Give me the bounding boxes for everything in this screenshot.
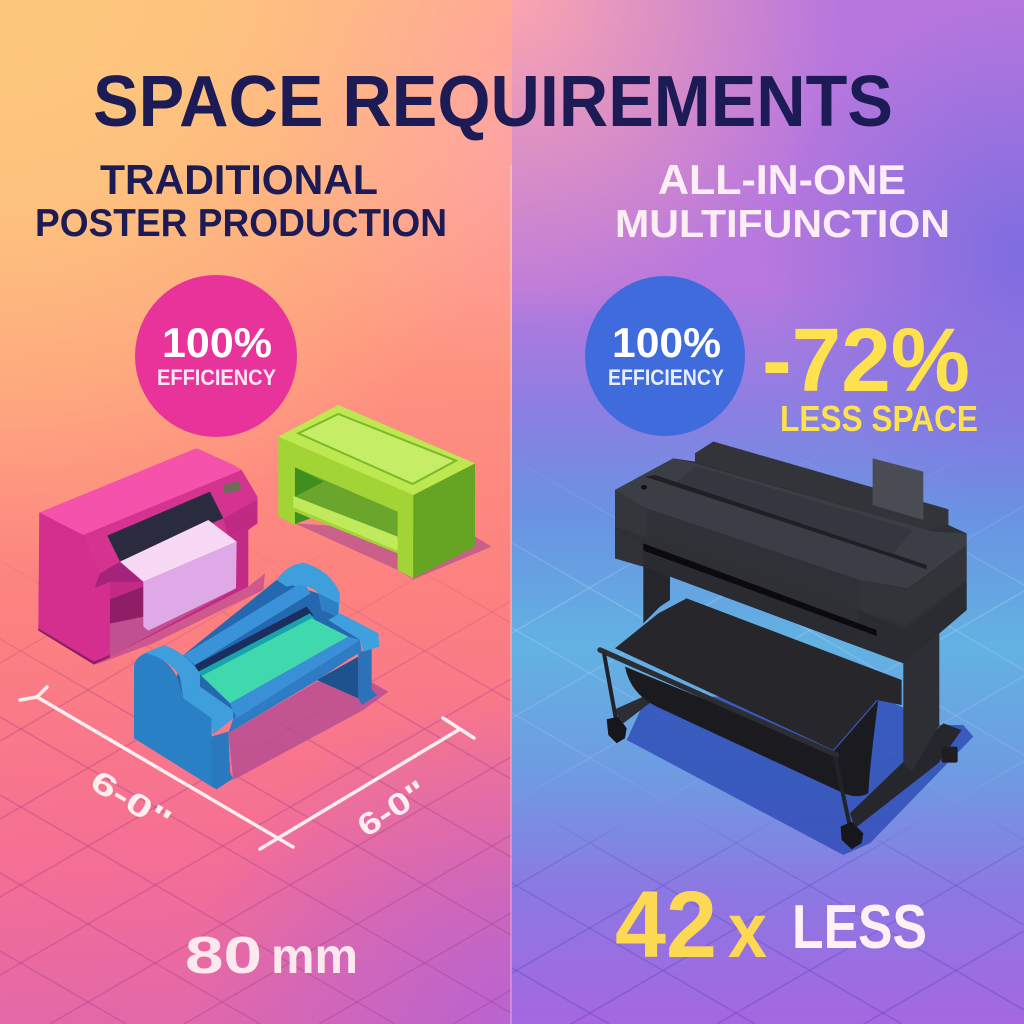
panel divider xyxy=(510,165,512,1024)
floor shadow xyxy=(627,697,973,855)
background: left panel gradient xyxy=(0,0,512,1024)
stat: 80mm: 80 xyxy=(185,927,262,985)
heading: all-in-one multifunction: ALL-IN-ONE xyxy=(658,156,906,203)
stat: 42x less xyxy=(615,872,927,978)
callout: -72% less space: -72% xyxy=(762,311,970,411)
stat: 80mm: mm xyxy=(271,928,358,984)
icon: dark all-in-one multifunction printer xyxy=(600,442,973,855)
heading: traditional poster production: TRADITIONAL xyxy=(100,156,378,203)
icon: blue laminator xyxy=(134,563,388,789)
icon: pink large-format printer xyxy=(38,448,265,665)
stat: 42x less: 42 xyxy=(615,872,717,978)
heading: traditional poster production xyxy=(35,156,447,245)
printer body xyxy=(615,442,967,663)
heading: all-in-one multifunction xyxy=(615,156,950,246)
title: SPACE REQUIREMENTS xyxy=(93,62,893,142)
badge: right 100% efficiency: 100% xyxy=(612,319,721,366)
floor grid: right xyxy=(512,430,1024,1024)
badge: left 100% efficiency: 100% xyxy=(162,319,272,366)
stat: 42x less: x xyxy=(728,886,767,974)
background: right panel gradient xyxy=(512,0,1024,1024)
stat: 42x less: LESS xyxy=(792,893,927,962)
dimension label: 6-0 left: 6-0" xyxy=(84,763,178,838)
badge: left 100% efficiency: EFFICIENCY xyxy=(157,365,276,390)
badge: right 100% efficiency xyxy=(585,276,745,436)
stand base and legs xyxy=(613,565,962,828)
icon: green finishing table xyxy=(278,405,492,579)
dimension lines xyxy=(20,687,474,849)
media bin xyxy=(600,598,902,849)
heading: traditional poster production: POSTER PRODUCTION xyxy=(35,202,447,245)
stat: 80mm xyxy=(185,927,358,985)
badge: right 100% efficiency: EFFICIENCY xyxy=(608,365,724,390)
heading: all-in-one multifunction: MULTIFUNCTION xyxy=(615,203,950,246)
callout: -72% less space: LESS SPACE xyxy=(780,398,978,439)
dimension label: 6-0 right: 6-0" xyxy=(351,773,434,844)
badge: left 100% efficiency xyxy=(135,275,297,437)
floor grid: left xyxy=(0,463,511,1024)
